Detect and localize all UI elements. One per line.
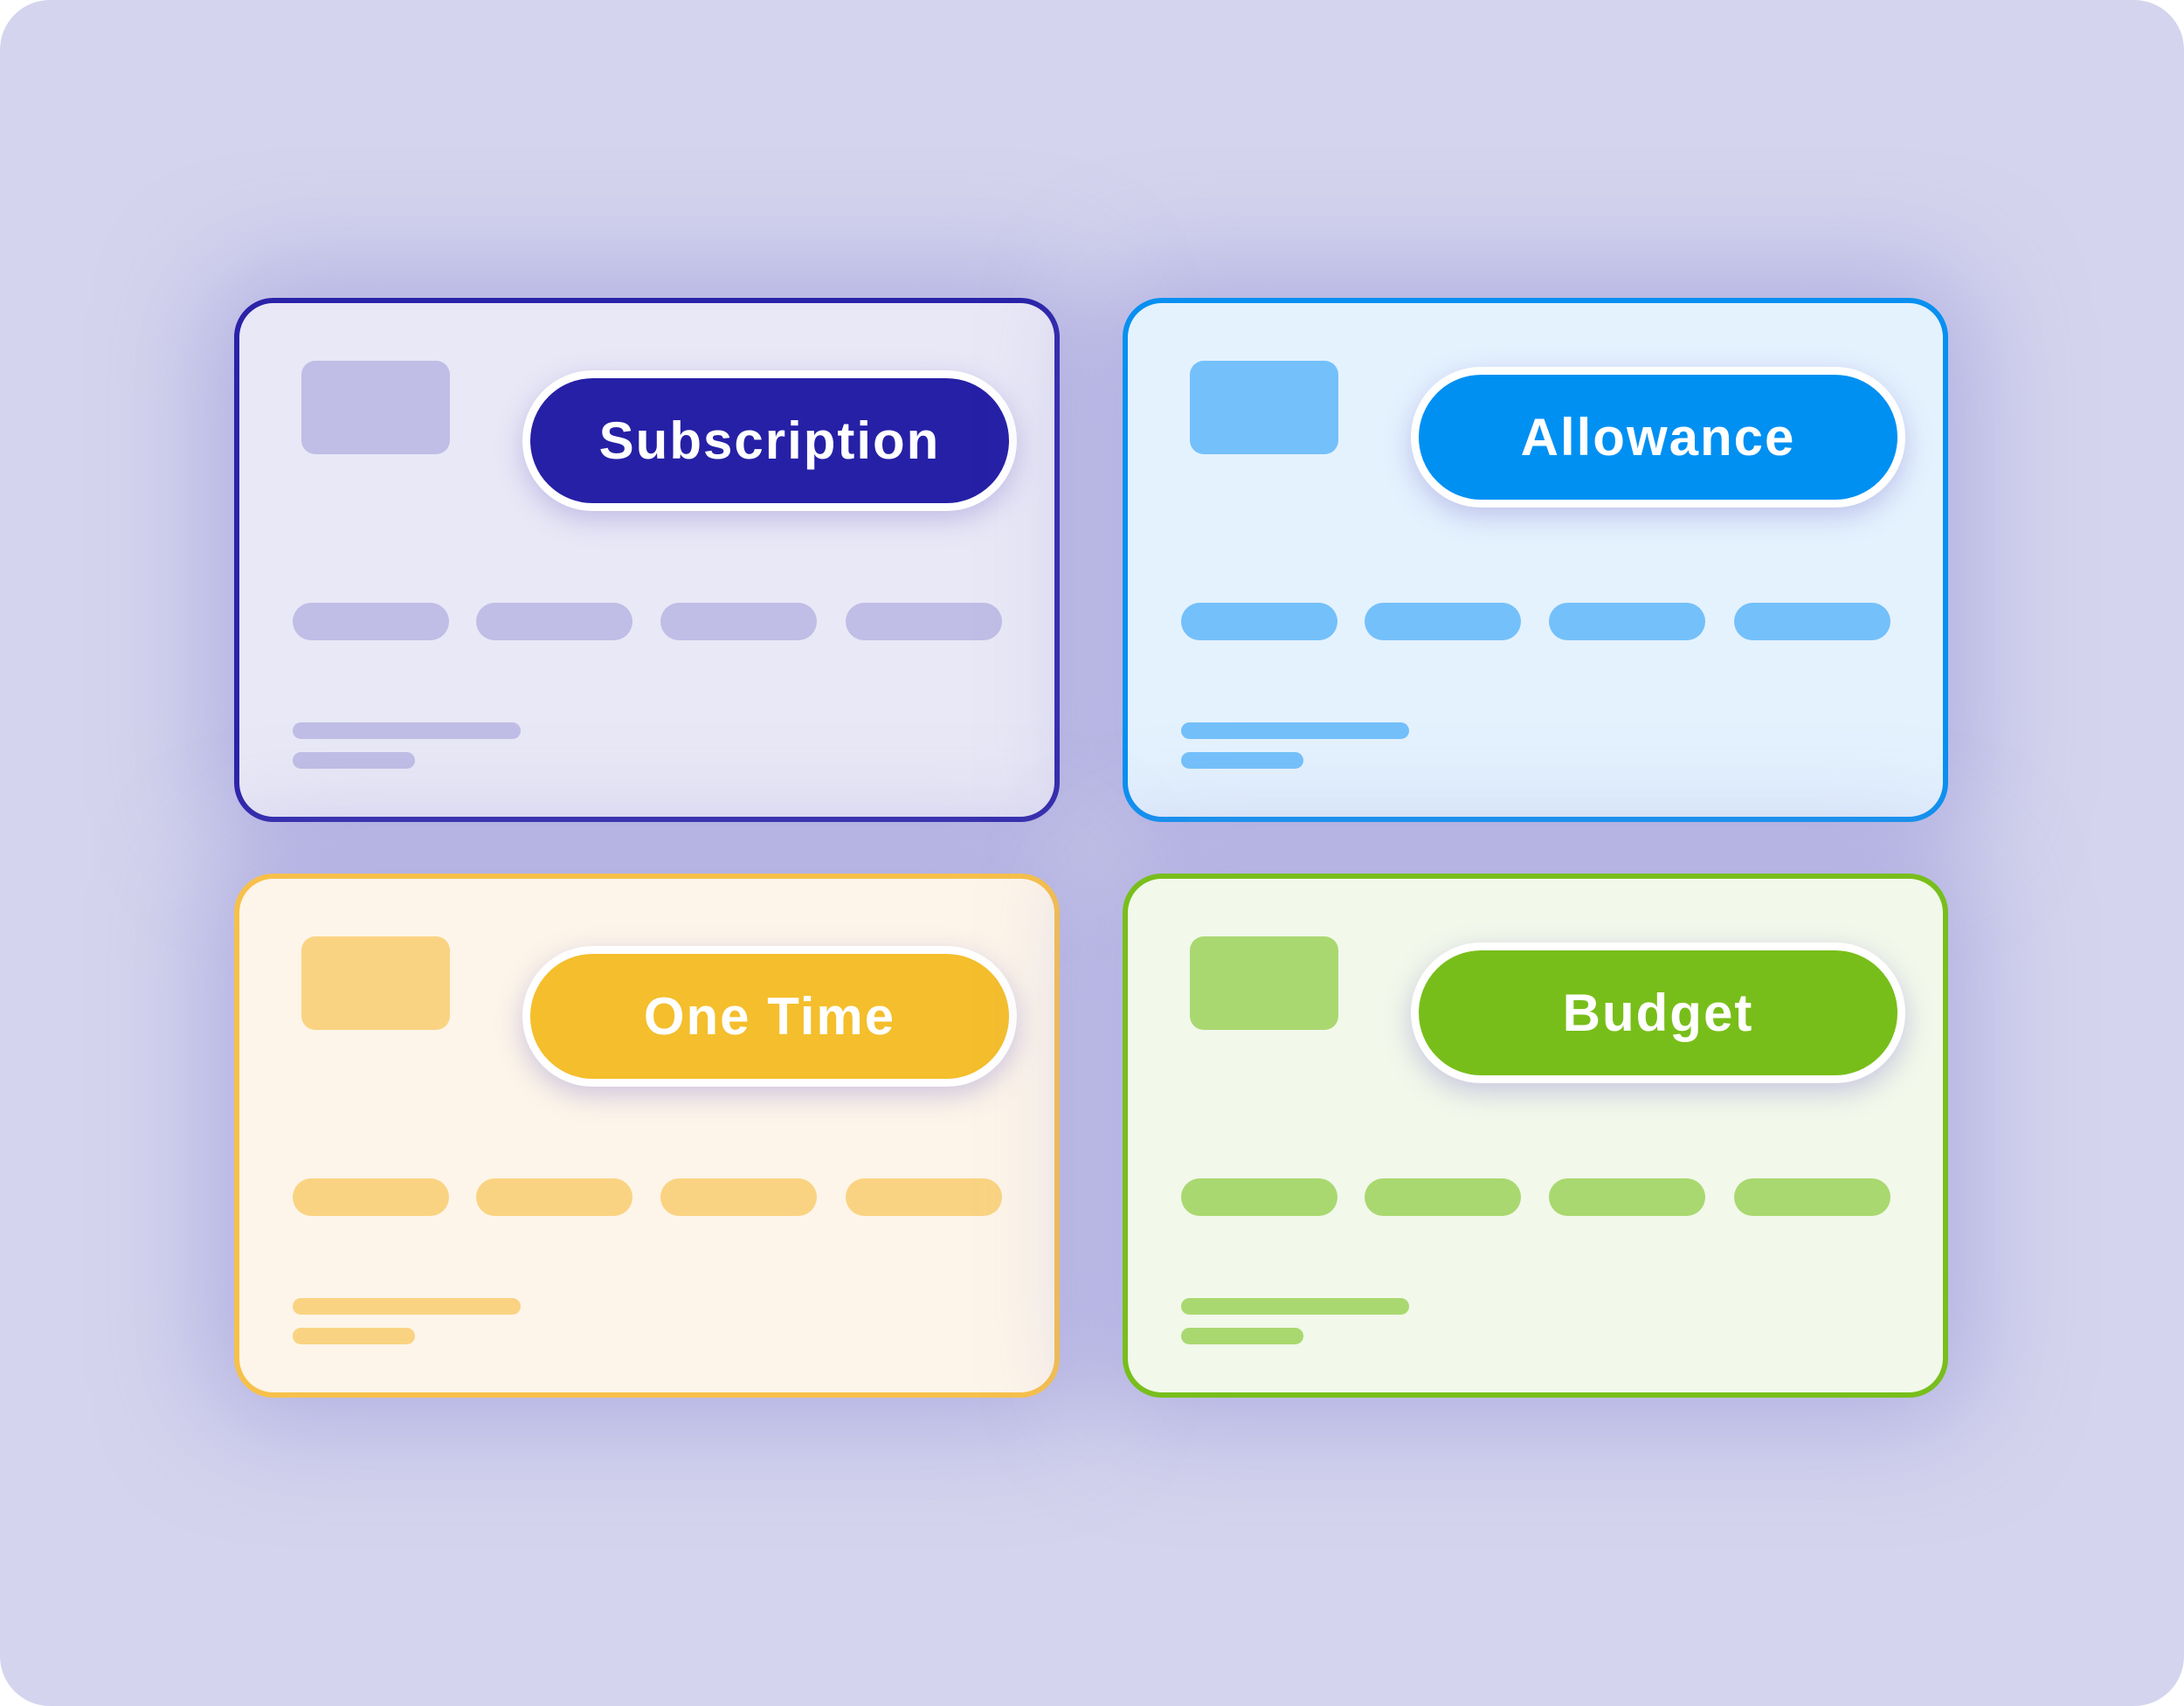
- pill: One Time: One Time: [644, 987, 895, 1046]
- text lines: [1181, 1298, 1409, 1344]
- card: allowance: [1123, 298, 1948, 822]
- bar row: [293, 603, 1002, 640]
- card: one time: [234, 874, 1060, 1398]
- text lines: [293, 1298, 521, 1344]
- bar row: [293, 1178, 1002, 1216]
- card: budget: [1123, 874, 1948, 1398]
- bar row: [1181, 603, 1890, 640]
- placeholder image: [301, 936, 450, 1030]
- pill: Allowance: Allowance: [1521, 408, 1795, 466]
- placeholder image: [1190, 361, 1338, 454]
- pill: Subscription: [522, 370, 1017, 511]
- pill: Subscription: Subscription: [599, 411, 940, 470]
- pill: One Time: [522, 946, 1017, 1087]
- pill: Budget: Budget: [1563, 984, 1753, 1042]
- bar row: [1181, 1178, 1890, 1216]
- placeholder image: [301, 361, 450, 454]
- pill: Budget: [1411, 943, 1905, 1083]
- text lines: [1181, 722, 1409, 769]
- card: subscription: [234, 298, 1060, 822]
- pill: Allowance: [1411, 367, 1905, 508]
- placeholder image: [1190, 936, 1338, 1030]
- text lines: [293, 722, 521, 769]
